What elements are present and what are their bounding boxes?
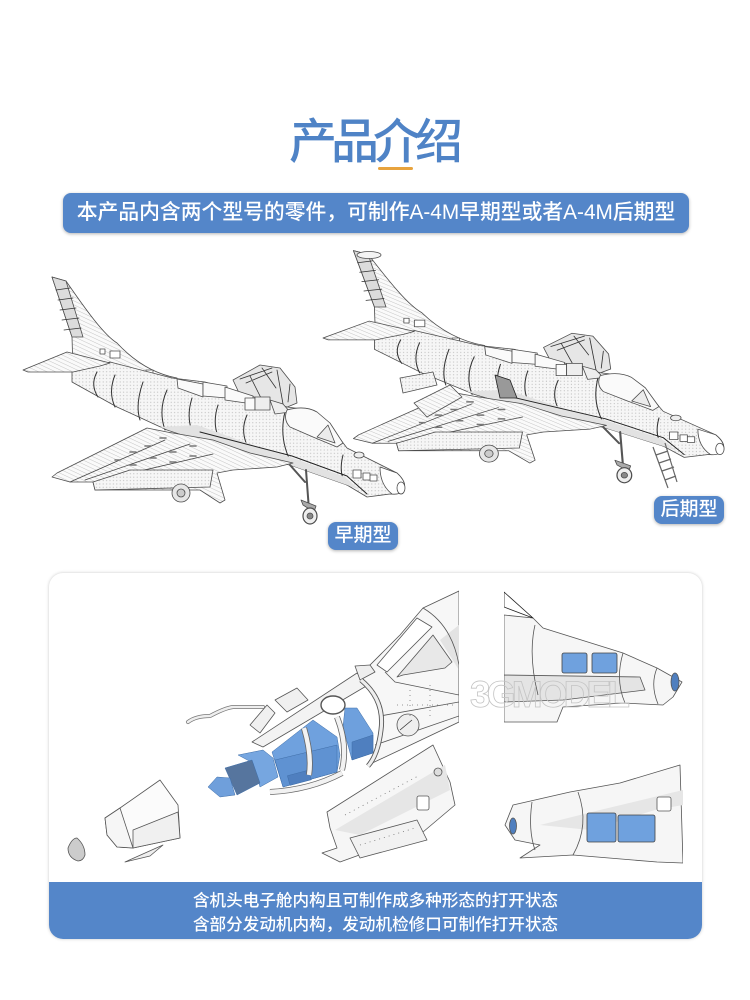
- tailplane: [23, 352, 110, 372]
- lower right nose view: [505, 765, 683, 863]
- radome tip: [68, 838, 85, 861]
- watermark: 3GMODEL: [470, 674, 630, 715]
- caption footer: 含部分发动机内构，发动机检修口可制作打开状态: [193, 915, 558, 934]
- open avionics hatch: [495, 375, 517, 398]
- grey body band: [540, 790, 683, 830]
- main wheel: [172, 484, 190, 502]
- blue avionics windows: [562, 653, 617, 673]
- fuselage side: [504, 615, 682, 722]
- subtitle banner: 本产品内含两个型号的零件，可制作A-4M早期型或者A-4M后期型: [77, 201, 675, 224]
- bay frame rings: [270, 717, 344, 792]
- panel lines: [532, 625, 658, 704]
- panel: nose detail card: [49, 573, 702, 939]
- open avionics doors: [250, 688, 308, 733]
- lower nose cover with flap: [322, 745, 455, 862]
- fuselage underside: [505, 765, 683, 863]
- pitot probe: [188, 707, 263, 722]
- removed nose cone: [105, 780, 180, 848]
- open engine door upper: [400, 372, 437, 393]
- panel lines: [531, 792, 583, 855]
- early-type aircraft line drawing: [23, 277, 405, 524]
- canopy: [286, 408, 343, 447]
- wingtip missile rail on fin: [357, 252, 381, 258]
- main nose exploded view: [68, 591, 459, 862]
- late-type aircraft line drawing: [323, 251, 724, 483]
- cockpit hump behind canopy: [233, 365, 297, 410]
- late type label: [654, 496, 724, 524]
- forward fuselage with canopy: [360, 591, 459, 765]
- fuselage: [72, 362, 405, 497]
- subtitle banner: [63, 193, 689, 233]
- upper nose strip with hatch: [252, 665, 375, 747]
- caption footer: [49, 882, 702, 939]
- open nose ring: [361, 680, 382, 766]
- nose strake: [125, 845, 163, 862]
- late type label: 后期型: [660, 499, 718, 520]
- upper right nose view: [504, 592, 682, 722]
- open engine door lower: [414, 385, 462, 417]
- title: 产品介绍: [289, 116, 457, 169]
- tail fin: [52, 277, 177, 398]
- blue bay windows: [587, 813, 655, 842]
- early type label: 早期型: [334, 525, 392, 546]
- early type label: [328, 522, 398, 550]
- nose tip: [671, 673, 679, 691]
- spine equipment blocks: [177, 379, 290, 414]
- grey body band: [504, 675, 645, 702]
- title accent underline: [378, 167, 413, 170]
- radome blue tip: [510, 818, 516, 834]
- swept wing: [52, 428, 293, 503]
- caption footer: 含机头电子舱内构且可制作成多种形态的打开状态: [193, 891, 558, 910]
- late-type open access panels and boarding ladder: [357, 252, 677, 488]
- nose landing gear: [290, 465, 317, 524]
- canopy edge: [504, 592, 533, 618]
- blue avionics bay: [208, 708, 373, 797]
- nose cone and intake louvres: [353, 452, 405, 494]
- boarding ladder: [653, 443, 677, 488]
